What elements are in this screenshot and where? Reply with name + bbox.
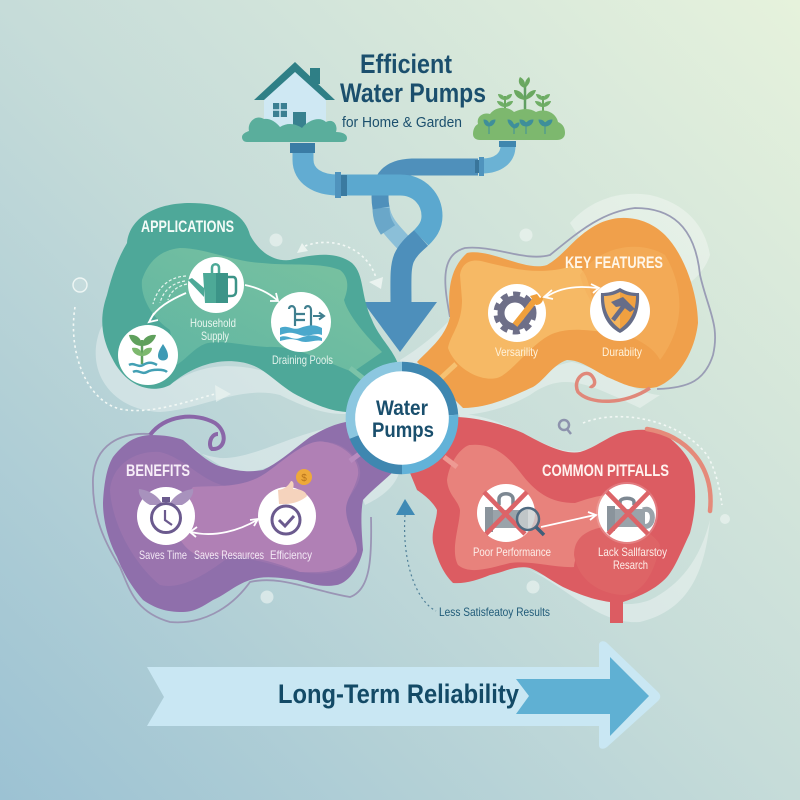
connector: pitfalls to hub: [444, 457, 457, 467]
title: for Home & Garden: [342, 114, 462, 131]
text: benefit labels: Efficiency: [270, 548, 312, 562]
icon: hand with coin: [278, 469, 312, 504]
icon: gear and wrench: [488, 284, 546, 342]
panel: applications: [102, 203, 400, 412]
text: pitfall labels: Poor Performance: [473, 545, 551, 559]
icon: stopwatch: [137, 487, 195, 545]
hub: water pumps: [346, 362, 458, 474]
panel: key features: [417, 208, 715, 408]
text: household supply: Supply: [201, 329, 229, 343]
icon: shield and hammer: [590, 281, 650, 341]
icon: garden: [473, 77, 565, 140]
hub: water pumps: Pumps: [372, 419, 434, 442]
text: long-term reliability: Long-Term Reliability: [278, 679, 519, 709]
text: pitfall labels: Resarch: [613, 558, 648, 572]
arrow: long-term reliability: [147, 641, 660, 749]
text: benefit labels: Saves Resaurces: [194, 548, 264, 562]
pipe: garden branch: [380, 141, 516, 252]
heading: key features: KEY FEATURES: [565, 253, 663, 272]
spray lines: [153, 276, 187, 304]
heading: benefits: BENEFITS: [126, 461, 190, 480]
curl: [150, 417, 224, 449]
icon: watering can: [188, 257, 244, 313]
connector: applications to hub: [350, 368, 364, 379]
text: household supply: [190, 316, 236, 343]
icon: pool: [271, 292, 331, 352]
arrow: versarility to durability: [544, 284, 599, 299]
icon: house: [242, 62, 347, 142]
icon: small magnifier: [559, 420, 571, 434]
outline: [93, 434, 371, 622]
curl: [576, 373, 650, 401]
connector: features to hub: [441, 364, 456, 378]
outline: [445, 208, 715, 389]
icon: lack of research pump: [596, 482, 658, 544]
text: pitfall labels: [473, 545, 667, 572]
hub: water pumps: Water: [376, 397, 428, 420]
title: Efficient: [360, 49, 452, 79]
text: less satisfactory results: Less Satisfeatoy Results: [439, 605, 550, 619]
icon: plant and water: [118, 325, 178, 385]
text: feature labels: Versarility: [495, 345, 538, 359]
pale background swooshes: [96, 194, 710, 622]
pipe: house branch: [290, 143, 432, 305]
arrow: poor performance to research: [541, 512, 596, 527]
icon: poor performance pump: [477, 484, 544, 542]
title: [340, 49, 486, 131]
heading: common pitfalls: COMMON PITFALLS: [542, 461, 669, 480]
arc: [647, 429, 711, 511]
icon: efficiency check: [258, 487, 316, 545]
arrow: pipe into hub: [363, 302, 437, 352]
text: household supply: Household: [190, 316, 236, 330]
heading: applications: APPLICATIONS: [141, 217, 234, 236]
panel: common pitfalls: [410, 417, 711, 623]
decorative dotted flows: [73, 242, 722, 505]
arrow: saves time to efficiency: [190, 519, 258, 537]
icon: hand with coin: $: [301, 473, 307, 484]
text: feature labels: Durabiity: [602, 345, 642, 359]
text: pitfall labels: Lack Sallfarstoy: [598, 545, 667, 559]
arrows: applications: [149, 285, 278, 322]
text: benefit labels: Saves Time: [139, 548, 187, 562]
text: draining pools: Draining Pools: [272, 353, 333, 367]
text: feature labels: [495, 345, 642, 359]
title: Water Pumps: [340, 78, 486, 108]
connector: benefits to hub: [350, 452, 362, 461]
panel: benefits: [93, 417, 395, 622]
text: benefit labels: [139, 548, 312, 562]
arrow: small blue triangle: [396, 499, 415, 515]
